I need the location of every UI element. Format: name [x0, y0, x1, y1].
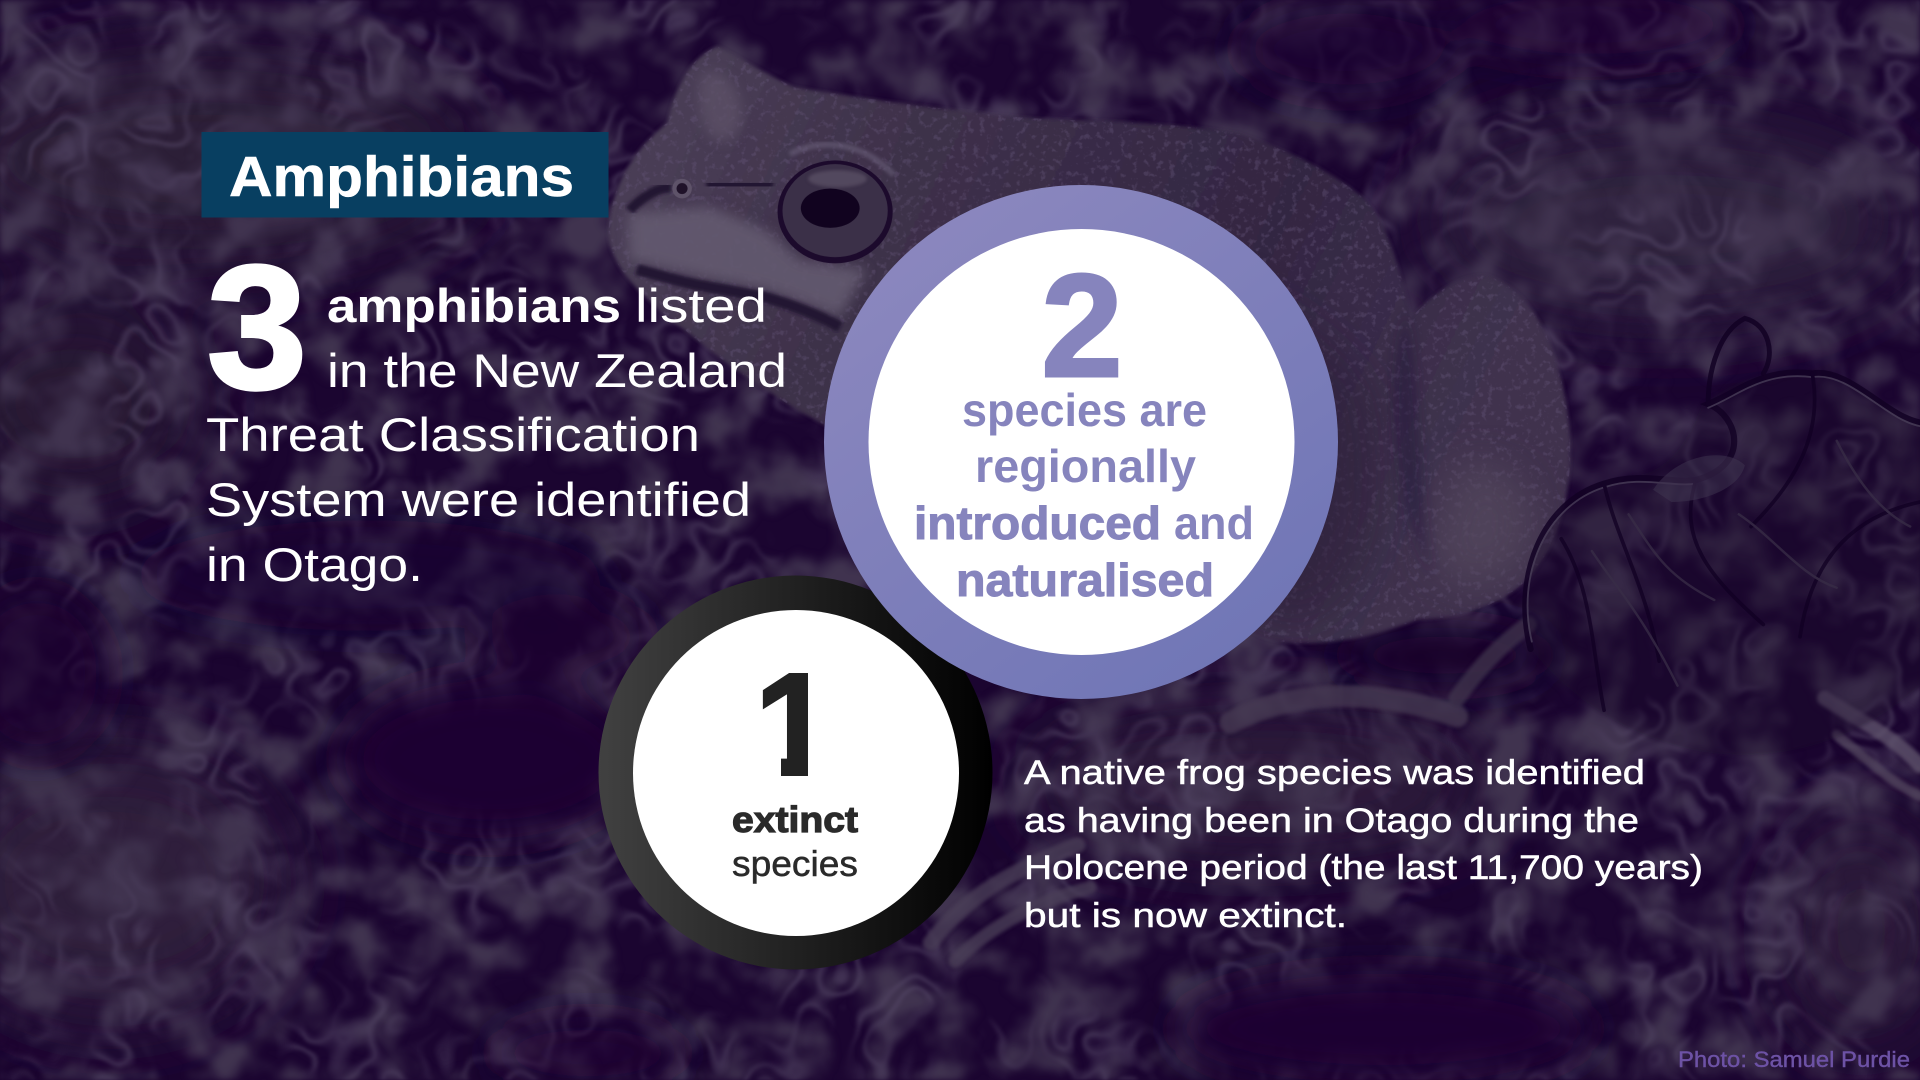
- label: extinct species: species: [732, 843, 858, 884]
- label: extinct species: [732, 799, 858, 884]
- label: species are regionally introduced and naturalised: introduced: [914, 497, 1161, 549]
- statement text: System were identified: [206, 473, 751, 526]
- statement text: listed: [635, 279, 767, 332]
- foreground content: [202, 132, 1910, 1068]
- heading: Amphibians: Amphibians: [229, 145, 574, 209]
- frog eye: [778, 160, 893, 263]
- plant at right: [1525, 318, 1920, 755]
- statement text: amphibians: [327, 279, 621, 332]
- circle: 1 extinct species: [598, 576, 992, 970]
- paragraph: native frog species: [1024, 754, 1703, 935]
- statement text: in the New Zealand: [327, 344, 787, 397]
- label: species are regionally introduced and naturalised: naturalised: [956, 554, 1214, 606]
- statement text: [206, 279, 787, 591]
- frog jaw and markings: [628, 207, 867, 317]
- front foot and foreground leaves: [931, 624, 1920, 961]
- label: species are regionally introduced and naturalised: [914, 384, 1254, 606]
- label: extinct species: extinct: [732, 799, 858, 840]
- big number 3: 3: [207, 230, 307, 426]
- text block: 3 amphibians listed: [206, 230, 787, 591]
- label: species are regionally introduced and naturalised: and: [1174, 497, 1254, 549]
- label: species are regionally introduced and naturalised: species are: [962, 384, 1207, 436]
- paragraph: native frog species: Holocene period (the last 11,700 years): [1024, 849, 1703, 887]
- circle: 2 species introduced: [824, 185, 1338, 699]
- paragraph: native frog species: but is now extinct.: [1024, 897, 1347, 935]
- photo credit: Photo: Samuel Purdie: [1678, 1047, 1910, 1072]
- big number 1: 1: [754, 643, 836, 806]
- big number 2: 2: [1041, 244, 1123, 407]
- statement text: Threat Classification: [206, 408, 700, 461]
- paragraph: native frog species: as having been in Otago during the: [1024, 802, 1639, 840]
- paragraph: native frog species: A native frog species was identified: [1024, 754, 1645, 792]
- label: species are regionally introduced and naturalised: regionally: [975, 440, 1196, 492]
- statement text: in Otago.: [206, 538, 423, 591]
- frog: [588, 24, 1592, 661]
- heading: Amphibians: [202, 132, 608, 218]
